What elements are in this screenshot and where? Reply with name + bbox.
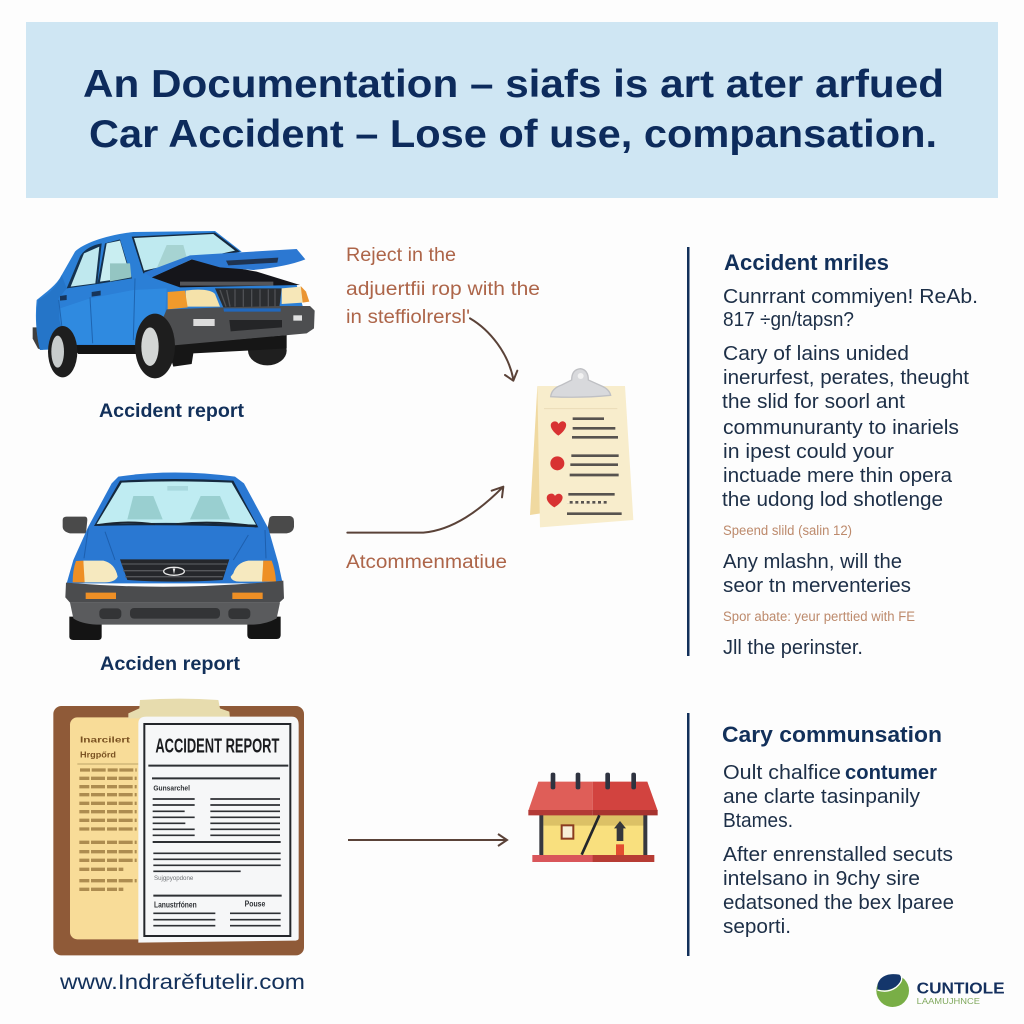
paragraph: consumer: ane clarte tasinpanily: [723, 786, 920, 808]
paragraph: intro: 817 ÷gn/tapsn?: [723, 309, 854, 331]
yellow sheet text: [77, 734, 138, 889]
paragraph: body: inctuade mere thin opera: [723, 465, 953, 487]
title banner: Car Accident – Lose of use, compansation.: [89, 113, 937, 156]
illustration: blue sedan with open hood: [33, 231, 315, 378]
title banner: An Documentation – siafs is art ater arfued: [83, 63, 944, 106]
illustration: clipboard with accident report: Sujgpyopdone: [154, 875, 194, 882]
paragraph: second: [723, 551, 911, 597]
paragraph: body: in ipest could your: [723, 441, 894, 463]
illustration: clipboard with accident report: Gunsarchel: [153, 783, 190, 792]
paragraph: after: edatsoned the bex lparee: [723, 892, 954, 914]
paragraph: after: seporti.: [723, 916, 791, 938]
illustration: clipboard with accident report: ACCIDENT REPORT: [155, 736, 279, 758]
text block: upper annotation: Reject in the: [346, 245, 456, 266]
text block: upper annotation: in steffiolrersl': [346, 307, 470, 328]
heading: compensation: Cary communsation: [722, 722, 942, 747]
paragraph: body: Cary of lains unided: [723, 343, 909, 365]
paragraph: after: After enrenstalled secuts: [723, 844, 953, 866]
icon: checklist clipboard with hearts: [530, 369, 633, 527]
annotation: recommendation label: Atcommenmatiue: [346, 552, 507, 573]
illustration: blue car front view: [63, 472, 294, 640]
logo wordmark: CUNTIOLE: [917, 980, 1005, 997]
logo: [876, 974, 1005, 1007]
paragraph: body: the udong lod shotlenge: [722, 489, 943, 511]
caption: accident report second: Acciden report: [100, 654, 241, 675]
panel: accident miles text: [722, 250, 978, 659]
title banner: [26, 22, 998, 198]
paragraph: intro: [723, 286, 978, 331]
paragraph: after: intelsano in 9chy sire: [723, 868, 920, 890]
arrow: report to building: [348, 834, 507, 846]
illustration: clipboard with accident report: Lanustrfónen: [154, 900, 197, 909]
arrow: lower annotation to checklist: [347, 487, 503, 533]
paragraph: body: inerurfest, perates, theught: [723, 367, 969, 389]
icon: house: [528, 773, 658, 862]
yellow sheet text: Inarcilert: [80, 734, 130, 744]
paragraph: after: [723, 844, 954, 938]
heading: accident miles: Accident mriles: [724, 250, 889, 275]
logo tagline: LAAMUJHNCE: [917, 996, 980, 1006]
panel: compensation text: [722, 722, 954, 938]
paragraph: body: the slid for soorl ant: [722, 391, 905, 413]
divider: upper panel: [687, 247, 690, 656]
paragraph: second: Any mlashn, will the: [723, 551, 902, 573]
paragraph: consumer: [723, 762, 937, 832]
text block: upper annotation: [346, 245, 540, 328]
paragraph: intro: Cunrrant commiyen! ReAb.: [723, 286, 978, 308]
yellow sheet text: Hrgpőrd: [80, 750, 116, 760]
paragraph: consumer: contumer: [845, 762, 937, 784]
paragraph: second: seor tn merventeries: [723, 575, 911, 597]
illustration: clipboard with accident report: Pouse: [245, 900, 266, 909]
arrow: annotation to checklist: [470, 318, 517, 381]
text block: upper annotation: adjuertfii rop with the: [346, 279, 540, 300]
paragraph: body: communuranty to inariels: [723, 417, 959, 439]
paragraph: body: [722, 343, 969, 511]
footer url: www.Indrarěfutelir.com: [59, 971, 305, 994]
small note: Speend slild (salin 12): [723, 523, 852, 538]
caption: accident report: Accident report: [99, 401, 245, 422]
divider: lower panel: [687, 713, 690, 956]
logo mark: [876, 974, 909, 1007]
small note second: Spor abate: yeur perttied with FE: [723, 609, 915, 624]
illustration: clipboard with accident report: [53, 699, 304, 955]
paragraph: closing: Jll the perinster.: [723, 637, 863, 659]
paragraph: consumer: Oult chalfice: [723, 762, 841, 784]
paragraph: consumer: Btames.: [723, 810, 793, 832]
